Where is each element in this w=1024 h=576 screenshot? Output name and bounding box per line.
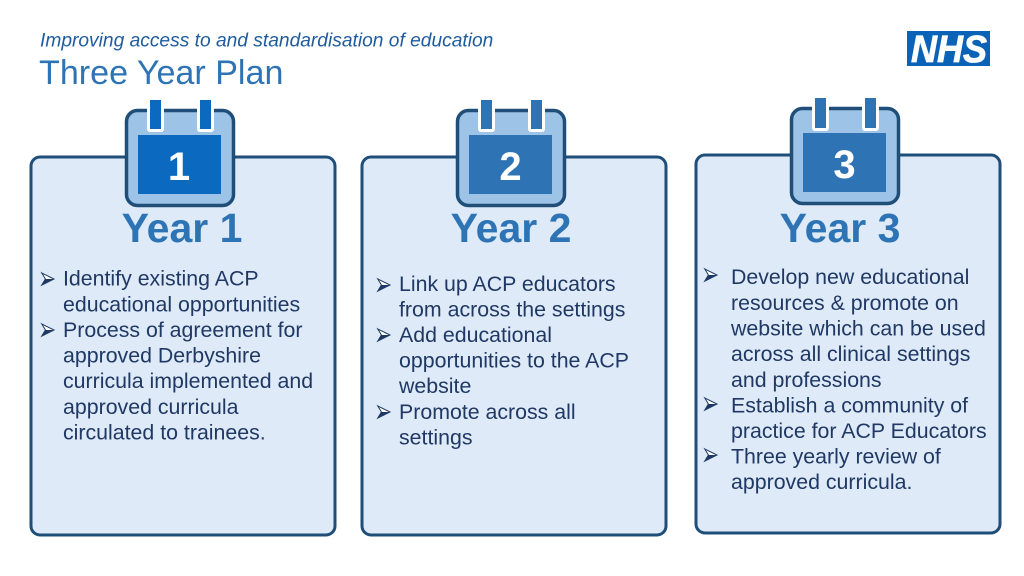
list: year 3 actions: and professions bbox=[731, 368, 882, 392]
panel: year 3 bbox=[696, 98, 1000, 533]
list: year 1 actions: Identify existing ACP bbox=[63, 266, 259, 290]
icon: calendar 3: 3 bbox=[833, 143, 856, 187]
heading: Year 1: Year 1 bbox=[122, 205, 242, 251]
list: year 2 actions: Add educational bbox=[399, 323, 552, 347]
list: year 2 actions: Link up ACP educators bbox=[399, 272, 616, 296]
list: year 3 actions: Develop new educational bbox=[731, 265, 969, 289]
list: year 3 actions: practice for ACP Educators bbox=[731, 419, 987, 443]
list: year 2 actions bbox=[378, 272, 629, 450]
icon: NHS logo: NHS bbox=[911, 29, 987, 71]
list: year 1 actions: Process of agreement for bbox=[63, 318, 302, 342]
list: year 3 actions: Three yearly review of bbox=[731, 444, 941, 468]
icon: calendar 2 bbox=[458, 100, 564, 206]
title: Three Year Plan bbox=[39, 54, 283, 92]
list: year 2 actions: website bbox=[398, 374, 471, 398]
list: year 2 actions: Promote across all bbox=[399, 400, 576, 424]
list: year 3 actions bbox=[705, 265, 987, 494]
icon: calendar 2: 2 bbox=[499, 145, 522, 189]
list: year 3 actions: website which can be used bbox=[730, 316, 986, 340]
list: year 2 actions: settings bbox=[399, 426, 473, 450]
list: year 3 actions: across all clinical settings bbox=[731, 342, 970, 366]
panel: year 2 bbox=[362, 100, 666, 535]
icon: calendar 1: 1 bbox=[168, 145, 190, 189]
icon: calendar 3 bbox=[792, 98, 898, 204]
list: year 2 actions: opportunities to the ACP bbox=[399, 348, 629, 372]
list: year 1 actions: approved Derbyshire bbox=[63, 344, 261, 368]
list: year 1 actions: circulated to trainees. bbox=[63, 420, 266, 444]
heading: Year 2: Year 2 bbox=[451, 205, 571, 251]
list: year 1 actions: approved curricula bbox=[63, 395, 239, 419]
list: year 1 actions bbox=[42, 266, 313, 444]
panel: year 1 bbox=[31, 100, 335, 535]
heading: Year 3: Year 3 bbox=[780, 205, 900, 251]
list: year 3 actions: approved curricula. bbox=[731, 470, 912, 494]
icon: calendar 1 bbox=[126, 100, 234, 206]
list: year 1 actions: educational opportunities bbox=[63, 292, 300, 316]
list: year 1 actions: curricula implemented and bbox=[63, 369, 313, 393]
list: year 3 actions: Establish a community of bbox=[731, 394, 968, 418]
list: year 2 actions: from across the settings bbox=[399, 298, 625, 322]
list: year 3 actions: resources & promote on bbox=[731, 291, 959, 315]
subtitle: Improving access to and standardisation of education bbox=[40, 30, 493, 52]
